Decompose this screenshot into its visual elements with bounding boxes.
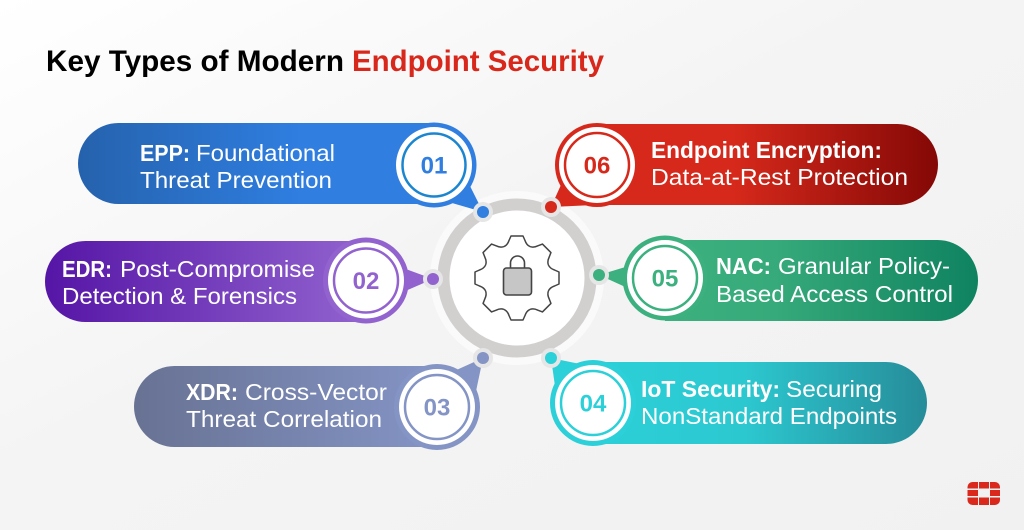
panel: 04 IoT Security: 04 — [580, 390, 607, 418]
panel: 05 NAC — [589, 236, 978, 321]
panel: 01 EPP: Threat Prevention — [140, 167, 332, 193]
panel: 01 EPP: 01 — [421, 152, 447, 180]
panel: 06 Endpoint Encryption: Data-at-Rest Protection — [651, 164, 908, 190]
panel: 02 EDR: EDR: — [62, 256, 112, 282]
panel: 05 NAC: Based Access Control — [716, 281, 953, 307]
panel: 01 EPP: Foundational — [196, 140, 335, 166]
icon: padlock — [504, 256, 532, 295]
panel: 03 XDR: XDR: — [186, 379, 238, 405]
title — [46, 45, 605, 78]
central hub: ring with gear and lock — [430, 191, 604, 365]
panel: 04 IoT Security: IoT Security: — [641, 376, 780, 402]
panel: 01 EPP: EPP: — [140, 140, 190, 166]
panel: 06 Endpoint Encryption — [541, 123, 938, 217]
panel: 03 XDR: Cross-Vector — [245, 379, 387, 405]
panel: 01 EPP — [78, 122, 493, 222]
panel: 03 XDR: 03 — [424, 394, 450, 422]
icon: red grid logo — [968, 482, 1000, 505]
icon: gear — [475, 236, 559, 320]
panel: 05 NAC: NAC: — [716, 253, 771, 279]
panel: 02 EDR — [45, 238, 443, 324]
title: Endpoint Security — [352, 45, 605, 78]
panel: 05 NAC: Granular Policy- — [778, 253, 950, 279]
panel: 04 IoT Security: NonStandard Endpoints — [641, 403, 897, 429]
panel: 06 Endpoint Encryption: 06 — [584, 152, 610, 180]
panel: 04 IoT Security: Securing — [786, 376, 882, 402]
panel: 03 XDR — [134, 348, 493, 450]
panel: 02 EDR: Post-Compromise — [120, 256, 315, 282]
panel: 02 EDR: 02 — [353, 268, 379, 295]
panel: 02 EDR: Detection & Forensics — [62, 283, 297, 309]
panel: 06 Endpoint Encryption: Endpoint Encryption: — [651, 137, 882, 163]
panel: 05 NAC: 05 — [652, 266, 678, 292]
title: Key Types of Modern — [46, 45, 344, 78]
panel: 04 IoT Security — [541, 348, 927, 446]
panel: 03 XDR: Threat Correlation — [186, 406, 382, 432]
